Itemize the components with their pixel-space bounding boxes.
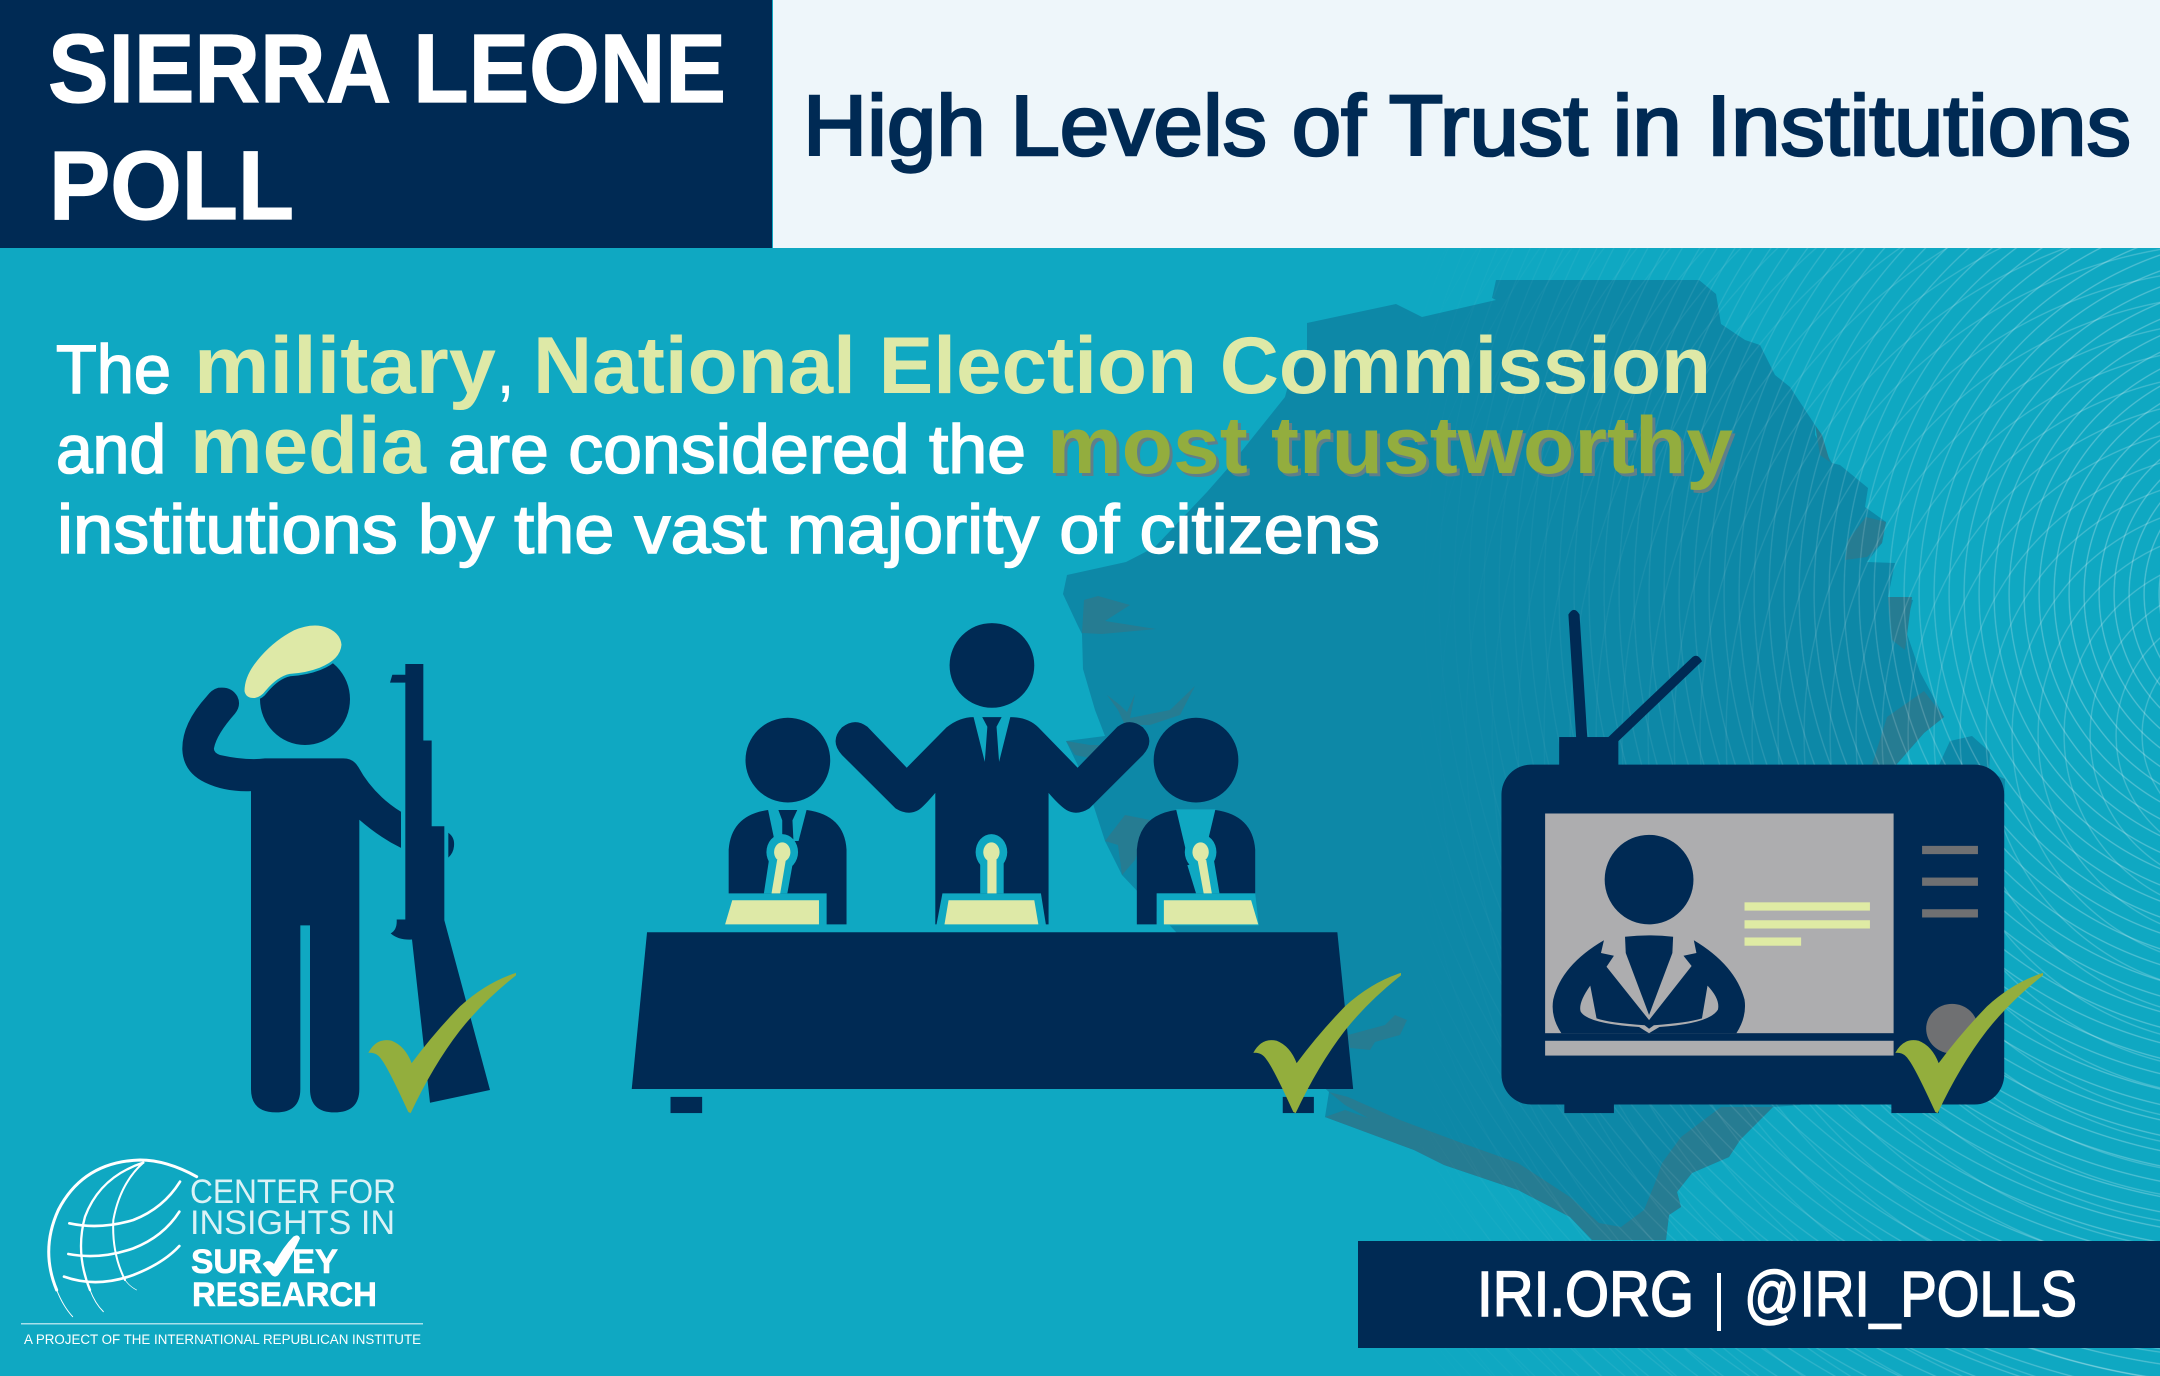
headline text: are considered the bbox=[448, 411, 1026, 488]
headline text bbox=[56, 321, 1736, 568]
icon: television with news presenter bbox=[1501, 610, 2004, 1113]
icon: check mark for election commission bbox=[1253, 973, 1401, 1113]
icon: on-screen text lines bbox=[1745, 902, 1870, 946]
logo: Center for Insights in Survey Research: RESEARCH bbox=[192, 1276, 377, 1314]
header: title panel bbox=[773, 0, 2160, 248]
header: poll label panel: SIERRA LEONE bbox=[48, 14, 726, 123]
headline text: most trustworthy bbox=[1047, 401, 1733, 491]
headline text: National Election Commission bbox=[533, 321, 1711, 411]
header: poll label panel: POLL bbox=[49, 131, 294, 240]
headline text: The bbox=[56, 331, 171, 408]
icon: right commissioner bbox=[1137, 718, 1259, 925]
header: title panel: High Levels of Trust in Institutions bbox=[803, 79, 2131, 174]
icon: center commissioner bbox=[836, 623, 1149, 925]
logo: Center for Insights in Survey Research bbox=[21, 1160, 423, 1347]
footer: website and handle banner bbox=[1358, 1241, 2160, 1348]
icon: table bbox=[632, 932, 1353, 1113]
headline text: military bbox=[194, 321, 496, 411]
icon: antennas bbox=[1559, 610, 1702, 768]
icon: check mark for media bbox=[1895, 973, 2043, 1113]
icon: saluting soldier with rifle bbox=[182, 624, 490, 1112]
icon: tv screen bbox=[1545, 813, 1894, 1056]
icon: check mark for military bbox=[368, 973, 516, 1113]
footer: website and handle banner: IRI.ORG bbox=[1477, 1258, 1694, 1330]
header: poll label panel bbox=[0, 0, 772, 248]
logo: Center for Insights in Survey Research: SUR bbox=[191, 1243, 262, 1281]
icon: left commissioner bbox=[725, 718, 847, 924]
logo: Center for Insights in Survey Research: INSIGHTS IN bbox=[190, 1204, 395, 1242]
footer: website and handle banner: @IRI_POLLS bbox=[1744, 1258, 2077, 1330]
icon: tv body bbox=[1501, 765, 2004, 1113]
icon: election commission panel at a table bbox=[632, 623, 1353, 1113]
logo: Center for Insights in Survey Research: EY bbox=[292, 1243, 338, 1281]
headline text: media bbox=[190, 401, 427, 491]
icon: presenter bbox=[1553, 835, 1745, 1033]
logo: Center for Insights in Survey Research: A PROJECT OF THE INTERNATIONAL REPUBLICAN INSTITUTE bbox=[24, 1332, 421, 1347]
icon: globe bbox=[49, 1160, 197, 1317]
headline text: , bbox=[496, 331, 515, 408]
headline text: and bbox=[56, 411, 166, 488]
logo: Center for Insights in Survey Research: CENTER FOR bbox=[190, 1173, 396, 1211]
headline text: most trustworthy bbox=[1050, 404, 1736, 494]
icon: logo check mark bbox=[263, 1235, 300, 1277]
headline text: institutions by the vast majority of citizens bbox=[57, 491, 1380, 568]
icon: tv controls bbox=[1922, 846, 1978, 1054]
